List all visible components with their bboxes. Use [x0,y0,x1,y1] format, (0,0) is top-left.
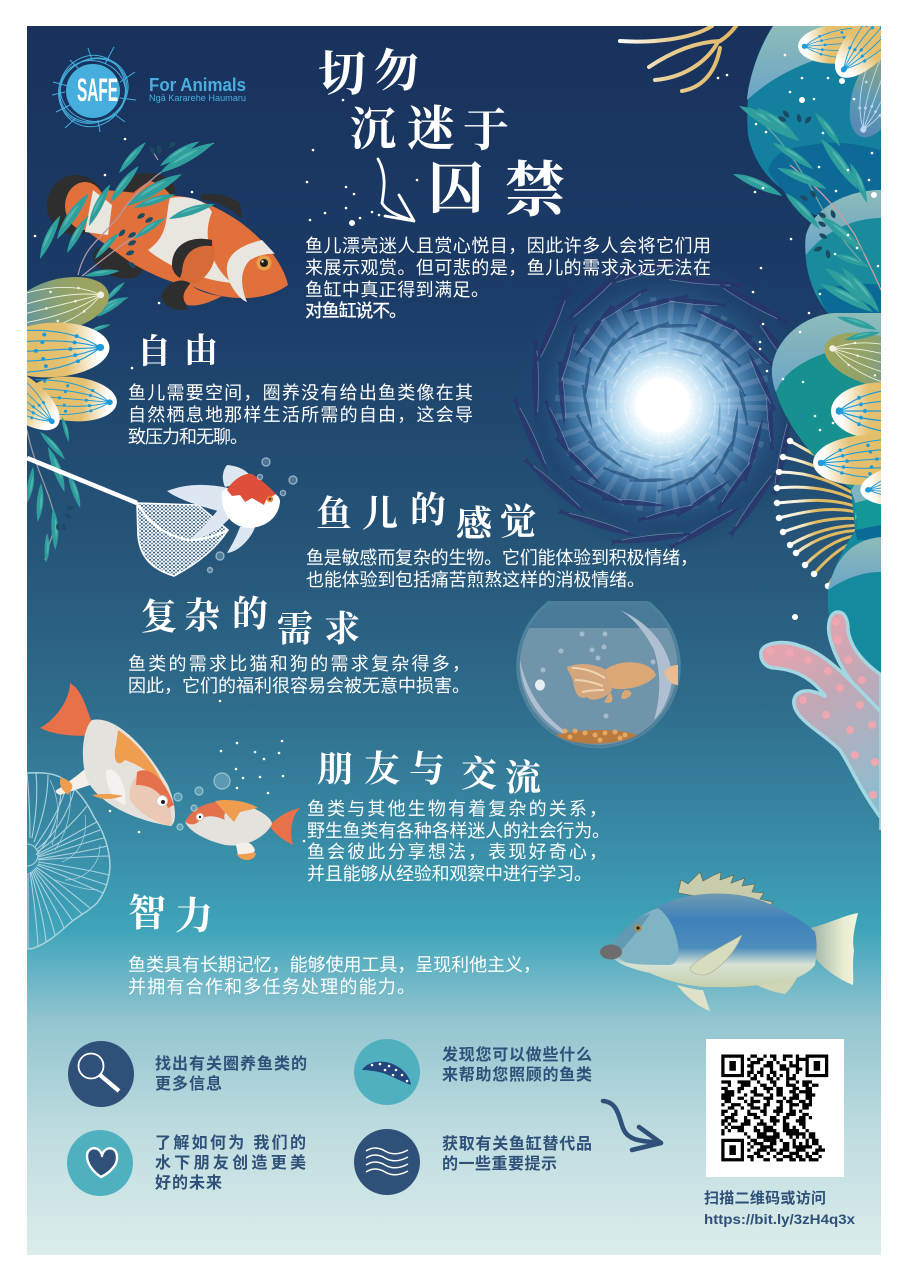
title arrow [378,159,414,221]
heading: friends and communication: 朋 [317,749,353,789]
heading: friends and communication: 友 [364,749,400,789]
feel text [306,548,698,590]
heading: complex needs: 求 [324,609,360,649]
QR caption: 扫描二维码或访问 [704,1189,826,1207]
heading: how fish feel [316,490,536,544]
logo: SAFE For Animals: SAFE [77,72,118,108]
right teal blob second [805,190,881,325]
fish bowl [518,601,680,753]
needs text: 因此，它们的福利很容易会被无意中损害。 [128,676,470,696]
heading: complex needs: 的 [232,594,268,634]
link: what you can do: 发现您可以做些什么 [442,1045,592,1064]
logo: SAFE For Animals [47,46,246,136]
title: 禁 [505,158,566,224]
friends text: 鱼类与其他生物有着复杂的关系， [307,799,607,819]
QR caption: https://bit.ly/3zH4q3x [704,1212,856,1227]
QR caption [704,1189,856,1227]
freedom text: 鱼儿需要空间，圈养没有给出鱼类像在其 [128,383,473,403]
feel text: 也能体验到包括痛苦煎熬这样的消极情绪。 [306,570,645,590]
heading: how fish feel: 觉 [500,502,536,542]
link: what you can do: 来帮助您照顾的鱼类 [442,1065,592,1084]
left leaves over clownfish [36,138,216,333]
intro text: 鱼儿漂亮迷人且赏心悦目，因此许多人会将它们用 [305,236,711,256]
right teal blob heart [772,313,881,500]
title [318,46,566,224]
right teal blob lower [828,484,881,673]
link: alternatives: 获取有关鱼缸替代品 [442,1134,592,1153]
intro text [305,236,711,321]
bubbles near goldfish [208,458,297,572]
heading: freedom: 由 [184,332,218,370]
heading: friends and communication: 流 [505,758,542,798]
link: alternatives [442,1134,592,1173]
heading: friends and communication [317,749,542,798]
arrow to QR [603,1101,661,1150]
right teal blob top [747,26,881,215]
fan coral right [780,441,855,584]
friends text [307,799,610,884]
heading: friends and communication: 与 [409,749,445,789]
intro text: 鱼缸中真正得到满足。 [305,279,489,300]
link: better future: 水下朋友创造更美 [155,1153,306,1172]
large white dots [352,81,874,617]
leaves right top [732,100,884,342]
clownfish [47,173,288,310]
heading: how fish feel: 感 [456,504,494,544]
title: 沉 [350,104,396,155]
link: alternatives: 的一些重要提示 [442,1155,557,1173]
link: what you can do [442,1045,592,1084]
title: 囚 [428,159,484,221]
freedom text [128,383,473,447]
needs text [128,654,470,696]
heading: how fish feel: 鱼 [316,494,352,534]
fish swirl tornado [511,254,813,555]
koi fish large [40,683,175,826]
fan coral tips [777,441,828,586]
friends text: 鱼会彼此分享想法，表现好奇心， [307,842,607,862]
heading: complex needs [141,594,360,649]
title: 勿 [374,46,419,96]
intro text: 来展示观赏。但可悲的是，鱼儿的需求永远无法在 [305,258,711,278]
jellyfish outline [16,773,110,949]
freedom text: 自然栖息地那样生活所需的自由，这会导 [128,405,473,425]
snow speckles [35,55,878,841]
intelligence text: 鱼类具有长期记忆，能够使用工具，呈现利他主义， [128,955,541,975]
gold branch top centre [620,26,736,91]
heading: intelligence [128,893,213,938]
intelligence text [128,955,541,997]
pods left [27,277,117,430]
link: better future: 了解如何为 我们的 [155,1133,306,1152]
fishing net [27,458,228,576]
link: find out more: 更多信息 [155,1074,222,1093]
heading: complex needs: 复 [141,597,177,637]
needs text: 鱼类的需求比猫和狗的需求复杂得多， [128,654,470,674]
feel text: 鱼是敏感而复杂的生物。它们能体验到积极情绪， [306,548,698,568]
pods right middle [813,332,881,504]
heading: friends and communication: 交 [461,754,498,794]
icon: magnifier [68,1041,134,1107]
icon: spotted fish [354,1039,420,1105]
blue fish [600,872,858,1011]
logo: SAFE For Animals: Ngā Kararehe Haumaru [149,93,246,104]
link: find out more: 找出有关圈养鱼类的 [155,1054,307,1073]
koi fish small [185,800,300,860]
heading: intelligence: 智 [128,893,166,935]
logo: SAFE For Animals: For Animals [149,74,246,95]
left leaves lower [27,417,80,563]
bubbles near koi [174,773,230,830]
heading: intelligence: 力 [175,896,213,938]
heading: how fish feel: 儿 [362,494,398,534]
pink coral [761,612,881,830]
link: better future [155,1133,306,1192]
icon: heart [67,1130,133,1196]
link: better future: 好的未来 [155,1174,222,1192]
intro text: 对鱼缸说不。 [305,300,407,321]
link: find out more [155,1054,307,1093]
friends text: 并且能够从经验和观察中进行学习。 [307,864,592,884]
title: 切 [318,48,366,101]
goldfish in net [167,465,280,553]
heading: complex needs: 需 [277,609,313,649]
friends text: 野生鱼类有各种各样迷人的社会行为。 [307,821,610,841]
title: 迷 [407,103,456,156]
QR code [706,1039,844,1177]
heading: how fish feel: 的 [410,490,446,530]
intelligence text: 并拥有合作和多任务处理的能力。 [128,977,415,997]
title: 于 [463,105,509,156]
freedom text: 致压力和无聊。 [128,427,248,447]
heading: freedom: 自 [137,333,171,371]
pods right top [798,26,881,138]
heading: complex needs: 杂 [184,596,221,636]
icon: waves [354,1129,420,1195]
heading: freedom [137,332,218,371]
